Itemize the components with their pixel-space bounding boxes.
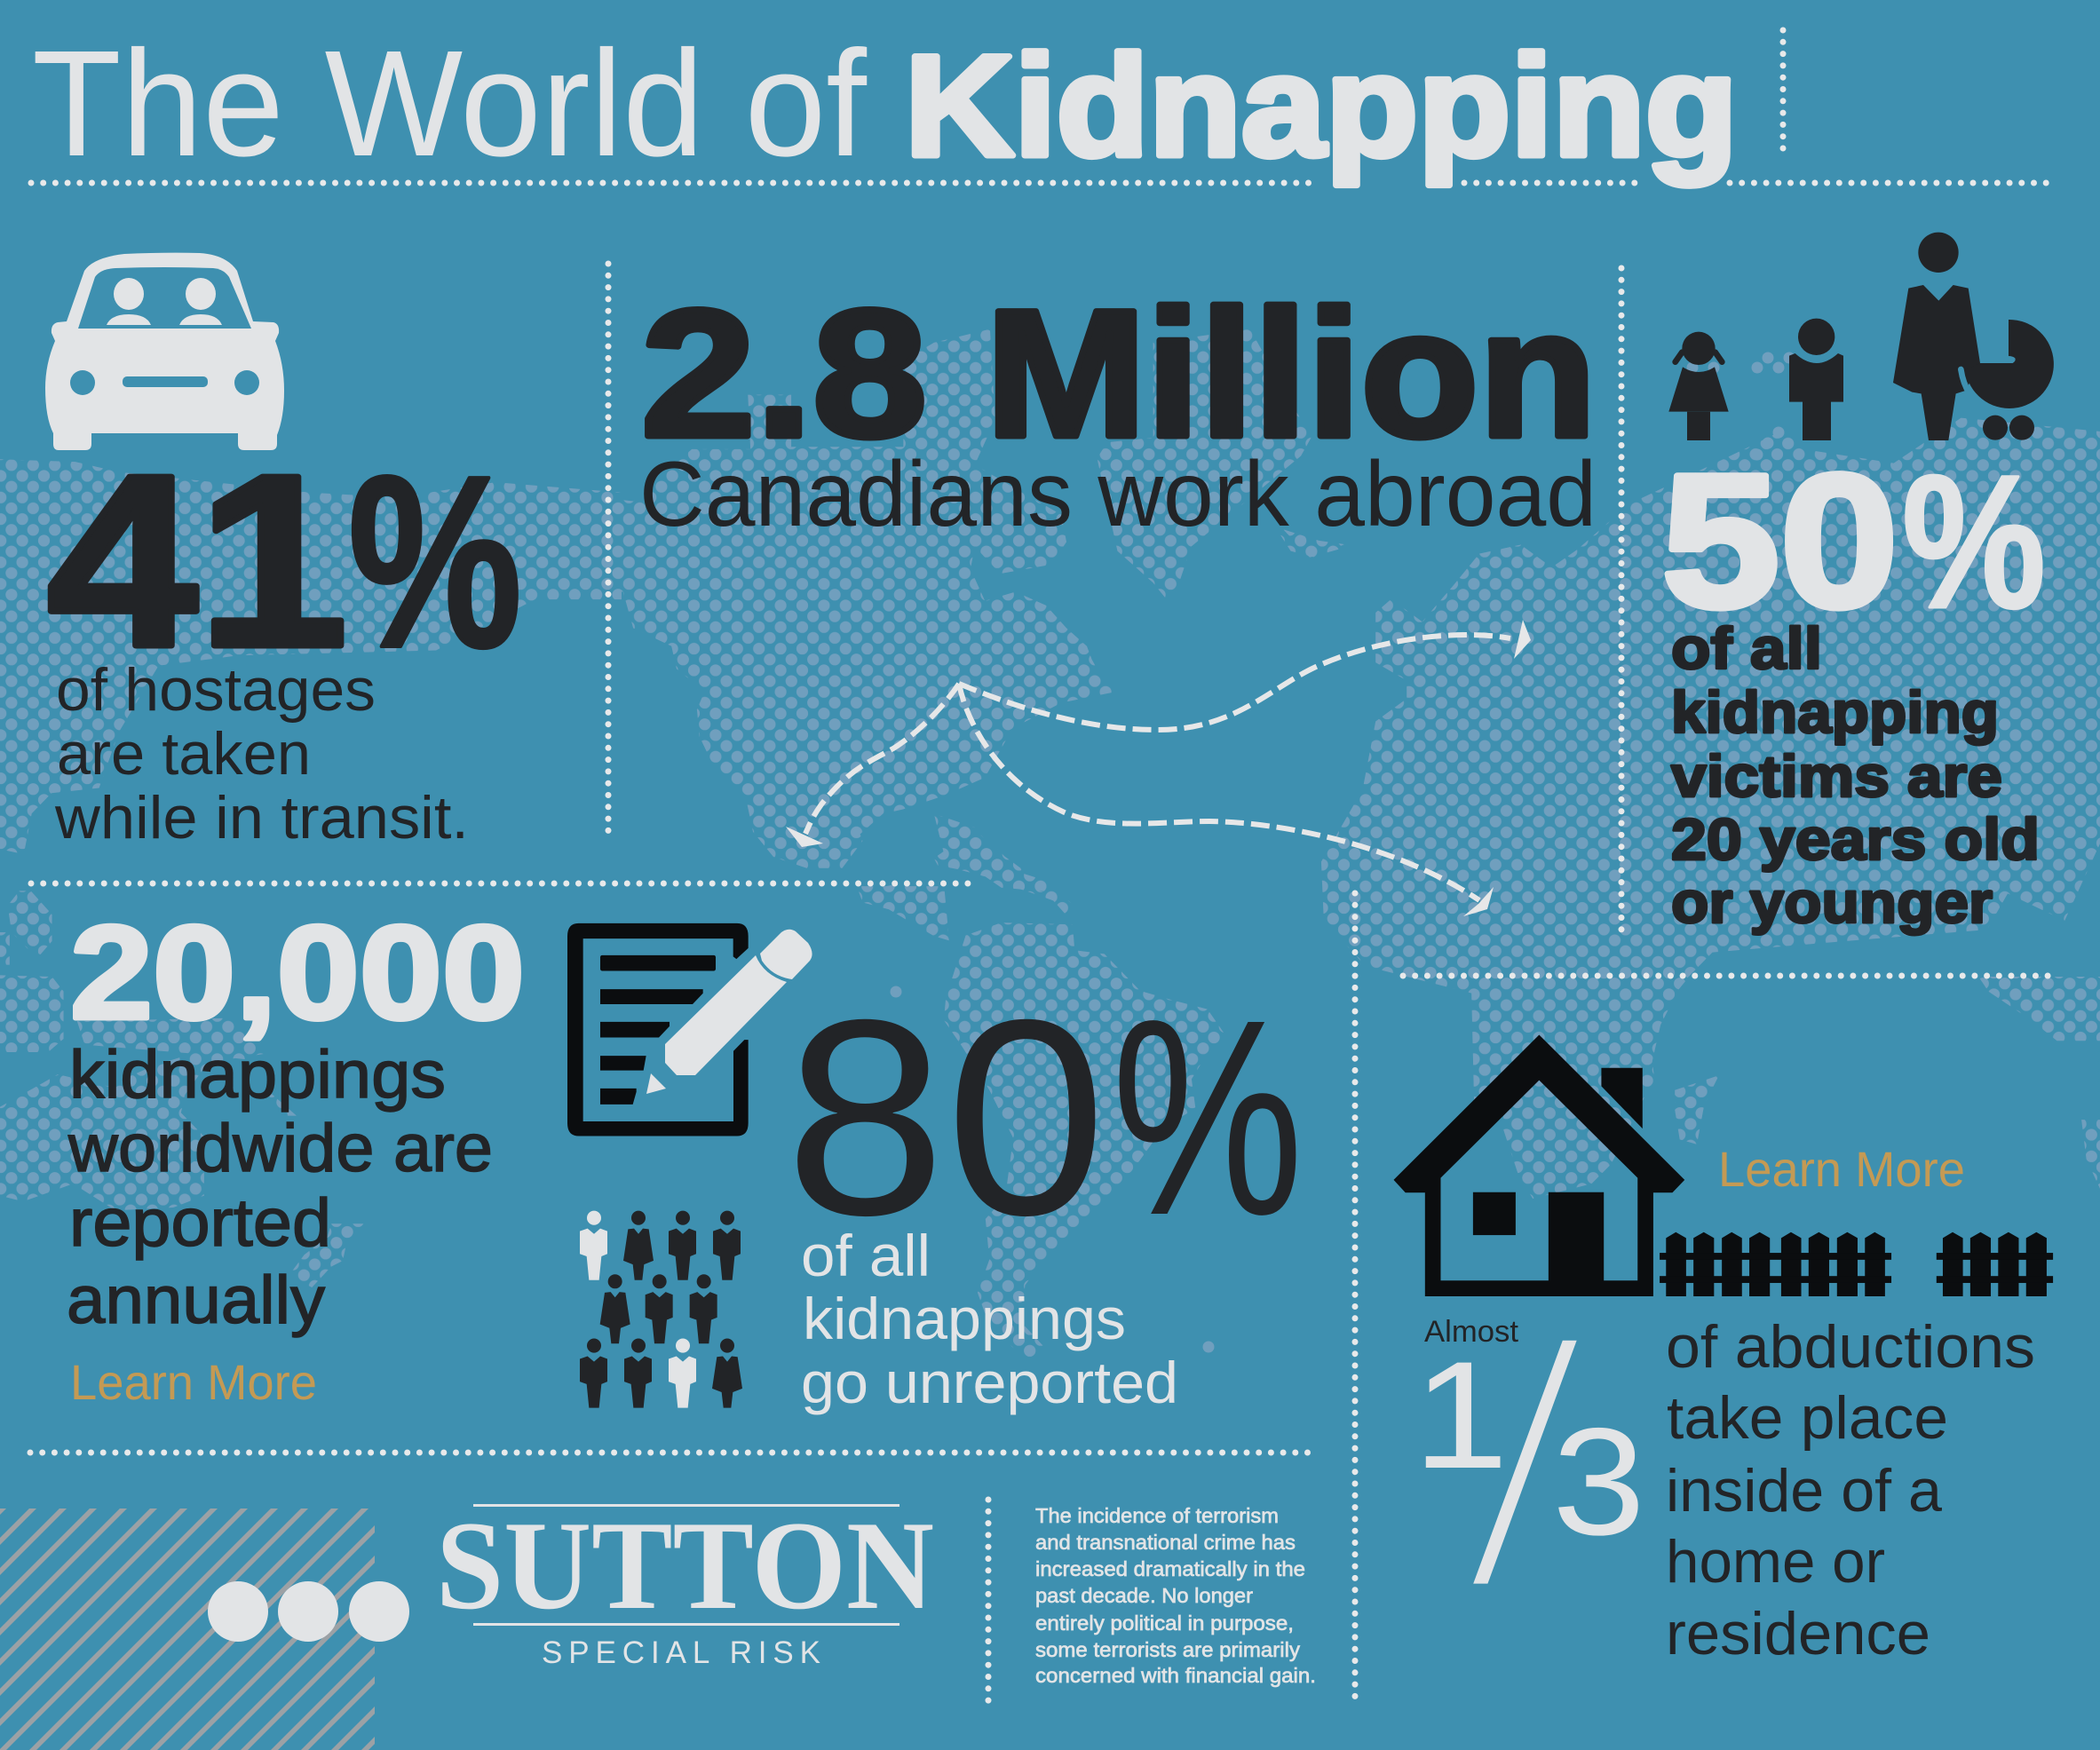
stat: 80 percent unreported: go unreported <box>801 1350 1178 1415</box>
stat: 20,000 kidnappings reported <box>67 898 525 1338</box>
text: abductions at home: residence <box>1666 1600 1930 1667</box>
stat: 41 percent of hostages: are taken <box>57 720 311 788</box>
text: terrorism note: concerned with financial gain. <box>1035 1664 1316 1687</box>
text: terrorism note: entirely political in purpose, <box>1035 1611 1294 1635</box>
stat: almost one third <box>1413 1281 1645 1651</box>
text: terrorism note: some terrorists are primarily <box>1035 1638 1300 1661</box>
icon: document with pencil <box>567 923 812 1136</box>
text: terrorism note: and transnational crime has <box>1035 1531 1296 1554</box>
stat: 50 percent of victims <box>1661 435 2046 935</box>
icon: car with two occupants <box>45 253 284 450</box>
link: learn more (right): Learn More <box>1718 1141 1965 1197</box>
stat: 2.8 million Canadians work abroad <box>639 273 1597 546</box>
striped panel <box>0 1508 375 1750</box>
stat: 20,000 kidnappings reported: worldwide are <box>67 1111 493 1186</box>
stat: 50 percent of victims: or younger <box>1671 869 1993 935</box>
stat: 41 percent of hostages: 41 <box>47 424 348 698</box>
stat: 80 percent unreported: of all <box>801 1223 931 1288</box>
logo: three circles <box>208 1581 409 1642</box>
stat: 50 percent of victims: 50 <box>1661 435 1898 647</box>
link: learn more (left): Learn More <box>70 1354 317 1410</box>
icon: crowd of people with two highlighted <box>580 1211 742 1408</box>
stat: 80 percent unreported: 80 <box>785 962 1106 1273</box>
stat: 20,000 kidnappings reported: 20,000 <box>70 898 525 1047</box>
stat: 41 percent of hostages <box>47 424 522 851</box>
logo: Sutton Special Risk: SPECIAL RISK <box>542 1635 820 1670</box>
text: terrorism note <box>1035 1504 1316 1687</box>
title: The World of <box>32 20 868 188</box>
stat: almost one third: 1 <box>1413 1330 1509 1501</box>
stat: 2.8 million Canadians work abroad: 2.8 <box>641 273 927 475</box>
stat: 20,000 kidnappings reported: reported <box>69 1185 331 1261</box>
stat: 20,000 kidnappings reported: kidnappings <box>69 1037 446 1113</box>
stat: 41 percent of hostages: % <box>348 425 522 699</box>
text: abductions at home <box>1666 1313 2035 1667</box>
arrows from Canada <box>786 620 1531 916</box>
icon: family with stroller <box>1668 233 2054 440</box>
stat: 80 percent unreported <box>785 962 1304 1415</box>
text: abductions at home: inside of a <box>1666 1457 1942 1524</box>
text: terrorism note: increased dramatically in the <box>1035 1557 1305 1580</box>
stat: 20,000 kidnappings reported: annually <box>67 1263 325 1338</box>
logo: Sutton Special Risk: SUTTON <box>436 1495 934 1635</box>
stat: 41 percent of hostages: while in transit. <box>54 784 469 851</box>
text: terrorism note: The incidence of terrorism <box>1035 1504 1279 1527</box>
text: abductions at home: take place <box>1667 1384 1948 1452</box>
icon: house with fence <box>1394 1035 2053 1296</box>
stat: almost one third: Almost <box>1424 1315 1519 1349</box>
stat: 50 percent of victims: kidnapping <box>1671 679 1999 745</box>
stat: 41 percent of hostages: of hostages <box>56 656 376 724</box>
text: abductions at home: of abductions <box>1666 1313 2035 1381</box>
stat: 50 percent of victims: victims are <box>1671 743 2002 809</box>
title: Kidnapping <box>905 26 1738 186</box>
world map dot pattern <box>0 329 2100 1357</box>
stat: 50 percent of victims: of all <box>1671 615 1822 681</box>
stat: 80 percent unreported: kidnappings <box>803 1286 1126 1351</box>
text: terrorism note: past decade. No longer <box>1035 1584 1253 1607</box>
stat: almost one third: / <box>1459 1281 1590 1651</box>
title <box>32 20 1738 188</box>
stat: almost one third: 3 <box>1552 1397 1645 1567</box>
text: abductions at home: home or <box>1666 1528 1885 1596</box>
stat: 2.8 million Canadians work abroad: Canadians work abroad <box>639 443 1597 546</box>
stat: 50 percent of victims: 20 years old <box>1671 806 2040 872</box>
stat: 50 percent of victims: % <box>1902 436 2046 648</box>
stat: 2.8 million Canadians work abroad: Million <box>986 273 1597 475</box>
stat: 80 percent unreported: % <box>1112 962 1304 1273</box>
